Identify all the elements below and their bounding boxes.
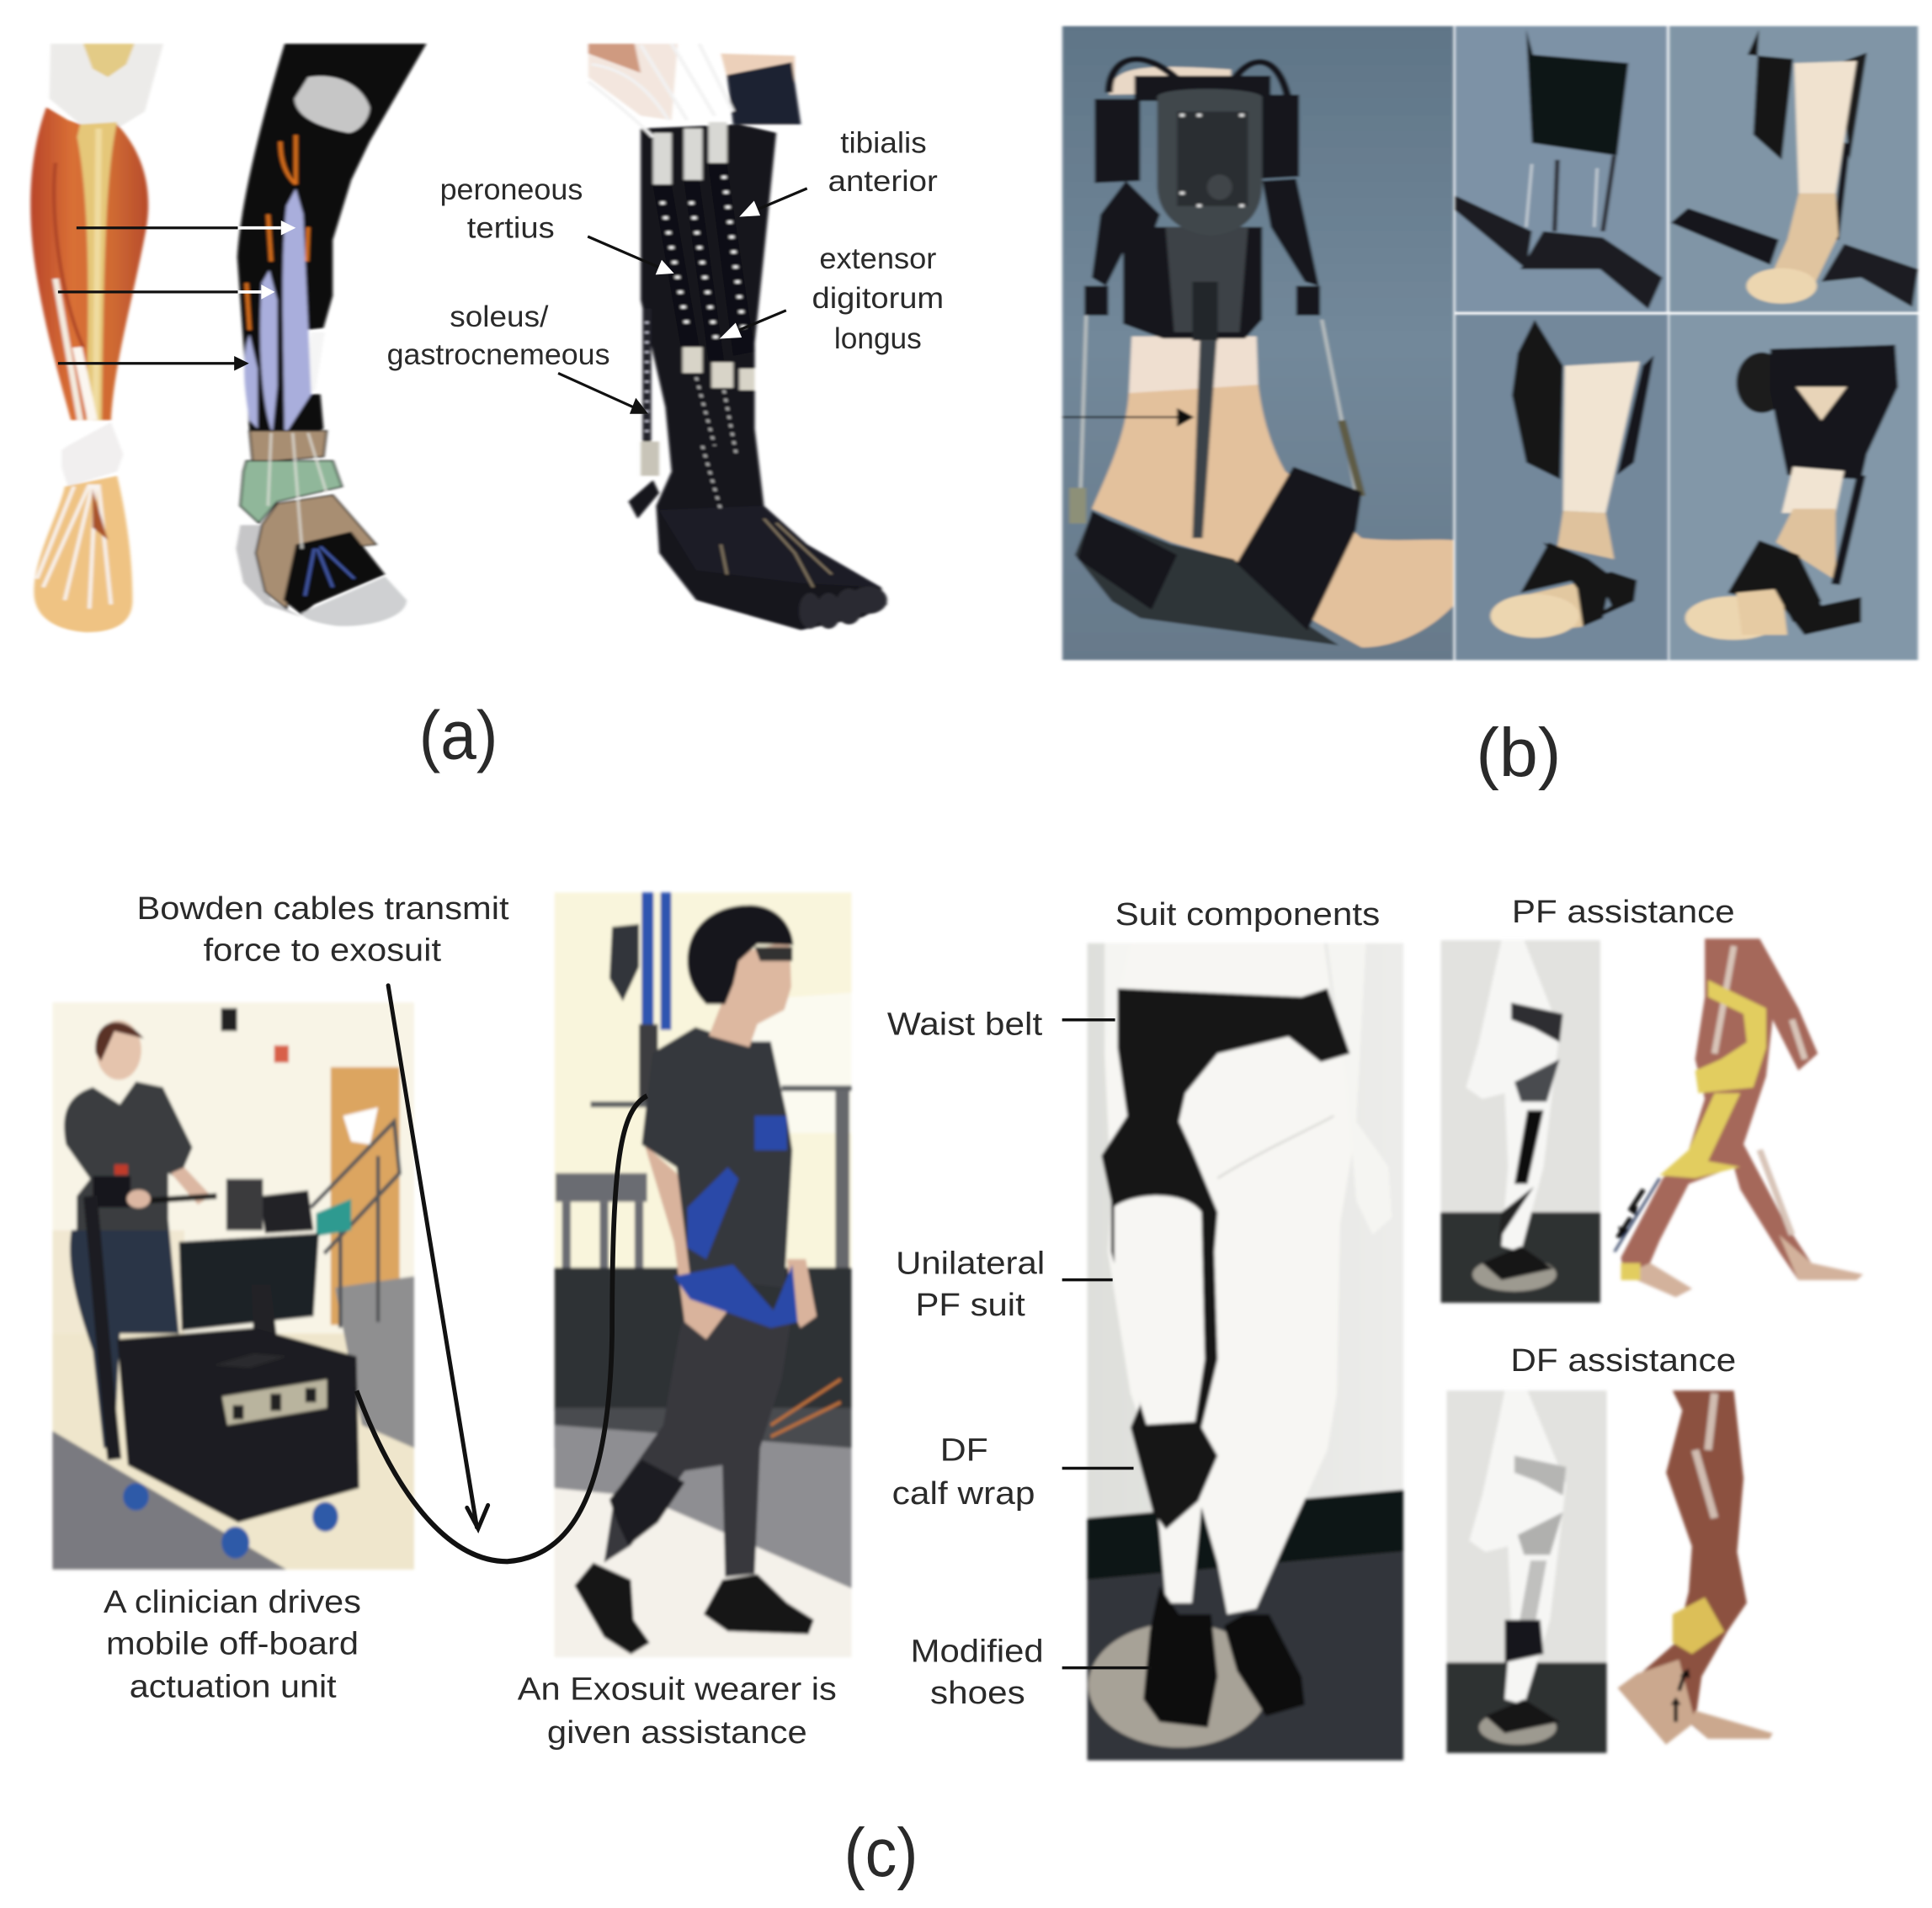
photo: instrumented sleeve on leg (588, 44, 887, 630)
labels: tendon names: peroneous (440, 173, 583, 206)
headings: suit and assistance (1115, 895, 1736, 1379)
labels: suit components with leader lines (887, 1007, 1152, 1711)
labels: system captions (104, 891, 837, 1751)
labels: suit components with leader lines: calf wrap (892, 1476, 1035, 1512)
headings: suit and assistance: Suit components (1115, 897, 1380, 933)
cable: Bowden cable between cart and wearer (357, 1096, 647, 1561)
labels: suit components with leader lines: Modified (911, 1634, 1044, 1669)
photo: mannequin with suit components (1088, 943, 1403, 1761)
label: (b): (b) (1476, 715, 1561, 791)
labels: tendon names (387, 126, 944, 371)
labels: tendon names: gastrocnemeous (387, 338, 610, 371)
labels: suit components with leader lines: shoes (930, 1676, 1025, 1711)
photo: wearer with exosuit (555, 892, 852, 1657)
labels: tendon names: anterior (828, 165, 938, 198)
headings: suit and assistance: DF assistance (1510, 1343, 1736, 1379)
photo: PF assistance mannequin (1441, 940, 1600, 1303)
labels: system captions: given assistance (547, 1715, 807, 1751)
headings: suit and assistance: PF assistance (1512, 895, 1735, 930)
labels: tendon names: soleus/ (450, 300, 549, 333)
illustration: DF assistance muscle figure (1618, 1390, 1773, 1745)
labels: tendon names: extensor (819, 242, 937, 275)
photo: device on foot form, bottom middle (1456, 315, 1669, 660)
labels: system captions: An Exosuit wearer is (518, 1672, 837, 1708)
panel: (b) ankle exoskeleton photos (1062, 26, 1918, 791)
labels: tendon names: longus (834, 322, 922, 355)
labels: suit components with leader lines: PF suit (915, 1288, 1025, 1323)
labels: tendon names: digitorum (812, 282, 944, 315)
label: (a): (a) (419, 698, 498, 774)
labels: suit components with leader lines: Unilateral (896, 1246, 1045, 1281)
illustration: PF assistance muscle figure (1615, 938, 1863, 1297)
photo: device on foot form, top right (1669, 26, 1918, 312)
arrows: sleeve labels (558, 189, 807, 414)
labels: suit components with leader lines: DF (940, 1433, 988, 1469)
panel: (c) soft exosuit system (52, 891, 1863, 1891)
photo: DF assistance mannequin (1447, 1390, 1607, 1753)
photo: device alone, top middle (1456, 26, 1667, 312)
panel: (a) sensor sleeve anatomy (30, 44, 944, 774)
label: (c): (c) (844, 1815, 918, 1891)
labels: system captions: actuation unit (130, 1670, 337, 1705)
labels: tendon names: tibialis (840, 126, 927, 159)
photo: front view of ankle device (1062, 26, 1454, 660)
labels: system captions: Bowden cables transmit (137, 891, 509, 927)
labels: tendon names: tertius (467, 211, 555, 244)
illustration: leg muscle anatomy (30, 44, 163, 632)
labels: system captions: force to exosuit (204, 933, 441, 969)
arrows: muscle to sensor mapping (58, 221, 295, 371)
labels: system captions: A clinician drives (104, 1585, 361, 1620)
labels: system captions: mobile off-board (106, 1627, 359, 1662)
photo: clinician with actuation cart (52, 1002, 414, 1570)
arrow: Bowden cable callout (388, 986, 488, 1528)
photo: device with motor, bottom right (1669, 315, 1918, 660)
labels: suit components with leader lines: Waist belt (887, 1007, 1043, 1042)
illustration: sensor sleeve diagram (236, 44, 426, 626)
